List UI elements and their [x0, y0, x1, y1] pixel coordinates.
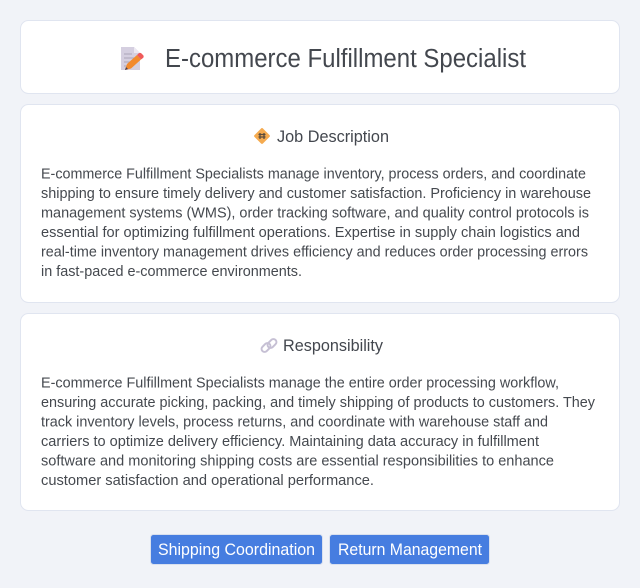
text block: responsibility: [41, 376, 596, 489]
panel: responsibility: [20, 314, 620, 510]
text block: responsibility: track inventory levels, process returns, and coordinate with warehouse staff and: [41, 414, 548, 430]
heading: title: E-commerce Fulfillment Specialist: [165, 45, 526, 73]
text block: responsibility: E-commerce Fulfillment Specialists manage the entire order processing workflow,: [41, 376, 559, 392]
icon: construction diamond: [254, 128, 270, 144]
text block: responsibility: customer satisfaction and operational performance.: [41, 473, 374, 489]
text block: job description: management systems (WMS), order tracking software, and quality control protocols is: [41, 206, 589, 222]
button: shipping coordination: [150, 534, 322, 564]
button: return management: [330, 534, 490, 564]
text block: job description: essential for optimizing fulfillment operations. Expertise in supply chain logistics and: [41, 225, 580, 241]
text block: responsibility: carriers to optimize delivery efficiency. Maintaining data accuracy in fulfillment: [41, 434, 539, 450]
text block: responsibility: ensuring accurate picking, packing, and timely shipping of products to customers. They: [41, 395, 596, 411]
text block: job description: [41, 166, 591, 280]
text block: job description: shipping to ensure timely delivery and customer satisfaction. Proficiency in warehouse: [41, 186, 591, 202]
panel: job description: [20, 104, 620, 302]
text block: job description: in fast-paced e-commerce environments.: [41, 264, 302, 280]
button: shipping coordination: Shipping Coordination: [158, 541, 315, 559]
heading: job description: Job Description: [277, 128, 389, 146]
icon: memo with pencil: [121, 47, 144, 70]
text block: responsibility: software and monitoring shipping costs are essential responsibilities to enhance: [41, 454, 554, 470]
button: return management: Return Management: [338, 541, 482, 559]
panel: title: [20, 20, 620, 94]
text block: job description: E-commerce Fulfillment Specialists manage inventory, process orders, and coordinate: [41, 166, 586, 182]
icon: chain link: [260, 338, 278, 353]
heading: responsibility: Responsibility: [283, 337, 384, 355]
text block: job description: real-time inventory management drives efficiency and reduces order processing errors: [41, 244, 588, 260]
